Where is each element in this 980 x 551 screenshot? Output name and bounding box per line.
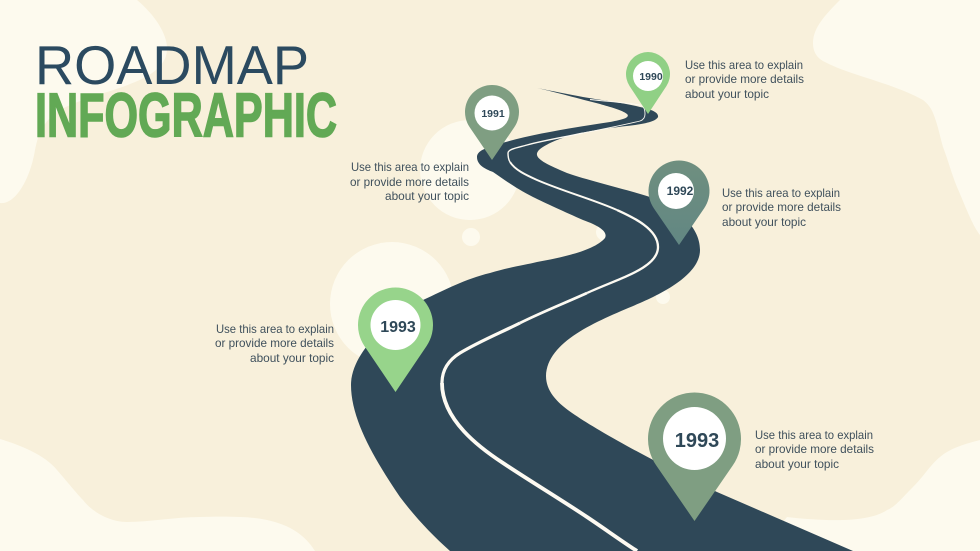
pin: 1991: 1991: [481, 108, 505, 120]
text block: 1991: Use this area to explain: [351, 160, 469, 174]
pin: 1991: [465, 85, 519, 160]
blob: top right: [813, 0, 980, 235]
pin: 1992: 1992: [667, 184, 694, 198]
text block: 1992: or provide more details: [722, 200, 841, 214]
text block: 1991: about your topic: [385, 189, 469, 203]
road: [351, 88, 853, 551]
pin: 1993 left: 1993: [380, 319, 416, 336]
pin: 1993 right: [648, 393, 741, 521]
text block: 1992: Use this area to explain: [722, 186, 840, 200]
pin: 1993 left: [358, 288, 433, 392]
pin: 1993 right: 1993: [675, 430, 719, 452]
text block: 1990: or provide more details: [685, 72, 804, 86]
title: ROADMAP: ROADMAP: [35, 34, 309, 96]
text block: 1990: Use this area to explain: [685, 58, 803, 72]
blob: bottom left: [0, 439, 315, 551]
pin: 1990: 1990: [639, 71, 663, 83]
decorative circles: [330, 120, 670, 366]
text block: 1993 left: or provide more details: [215, 336, 334, 350]
text block: 1990: about your topic: [685, 87, 769, 101]
pin: 1990: [626, 52, 670, 114]
text block: 1993 left: [215, 322, 334, 365]
text block: 1992: [722, 186, 841, 229]
title: INFOGRAPHIC: INFOGRAPHIC: [35, 82, 337, 150]
text block: 1993 right: [755, 428, 874, 471]
text block: 1993 right: about your topic: [755, 457, 839, 471]
text block: 1993 right: or provide more details: [755, 442, 874, 456]
text block: 1990: [685, 58, 804, 101]
text block: 1993 left: Use this area to explain: [216, 322, 334, 336]
text block: 1993 right: Use this area to explain: [755, 428, 873, 442]
text block: 1993 left: about your topic: [250, 351, 334, 365]
text block: 1992: about your topic: [722, 215, 806, 229]
text block: 1991: or provide more details: [350, 175, 469, 189]
text block: 1991: [350, 160, 469, 203]
pin: 1992: [648, 161, 710, 245]
blob: top left: [0, 0, 167, 203]
road centre line: [442, 100, 658, 551]
blob: bottom right: [760, 440, 980, 551]
